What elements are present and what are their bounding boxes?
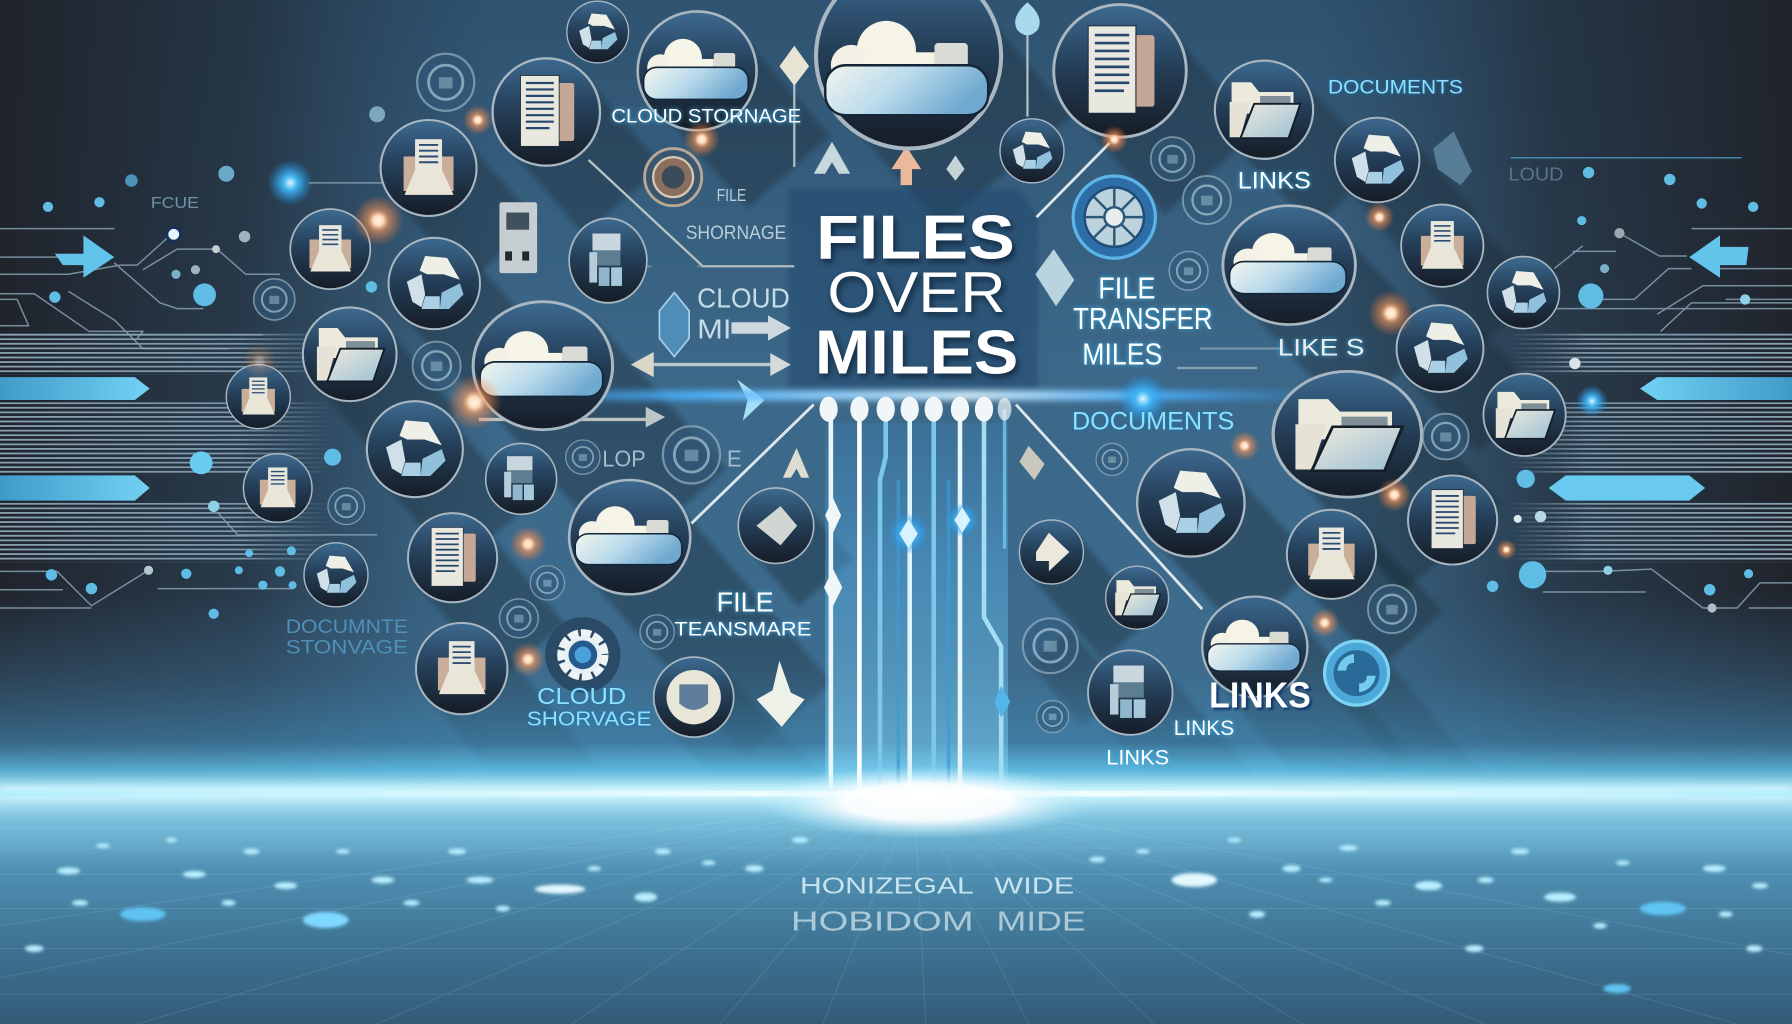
icon: teal ring left (254, 279, 295, 320)
floor sparkles (25, 837, 1768, 993)
right data dots (1487, 167, 1758, 613)
icon: cloud center left (473, 302, 613, 430)
icon: tiny ring (1037, 701, 1069, 733)
icon: document top (1054, 5, 1186, 137)
label: cloud shorvage: SHORVAGE (527, 708, 651, 731)
icon: doc lower far left (243, 454, 312, 522)
icon: small seal file transfer (1169, 251, 1208, 290)
arrow: right connector (770, 353, 791, 376)
icon: target wheel (1073, 176, 1155, 258)
diamond: small (946, 155, 965, 181)
icon: swirl right (1423, 414, 1469, 459)
label: documents center: DOCUMENTS (1072, 408, 1234, 436)
arrow: left connector (631, 352, 654, 377)
arrow: beige star (757, 661, 805, 727)
icon: small ring links (1183, 176, 1231, 224)
arrow: top diamond (779, 46, 809, 86)
label: cloud shorvage: CLOUD (537, 683, 626, 709)
label: lop e (602, 445, 742, 471)
icon: device (499, 202, 537, 273)
floor text: HONIZEGAL (800, 873, 974, 899)
label: links medium: LINKS (1174, 715, 1234, 740)
left data dots (43, 106, 385, 619)
label: lop e: E (727, 445, 742, 471)
icon: small ring right of top doc (1151, 137, 1194, 181)
icon: document left top (381, 120, 477, 216)
icon: small ring documents (1096, 443, 1128, 475)
arrow: up outline (814, 142, 850, 174)
icon: folder left (303, 307, 397, 401)
title panel (789, 189, 1038, 389)
icon: cloud right (1223, 206, 1355, 325)
label: file transfer miles: TRANSFER (1073, 301, 1213, 336)
label: documnte stonvage: DOCUMNTE (286, 616, 408, 638)
title: OVER (827, 261, 1006, 325)
icon: document lower right (1408, 475, 1497, 565)
icon: folder top right (1215, 61, 1313, 159)
icon: beige ring lower (663, 426, 720, 483)
icon: square lower (1088, 650, 1173, 735)
icon: pale ring (417, 54, 474, 111)
arrow: file cloud (768, 315, 791, 341)
arrow: up small center left (783, 448, 809, 478)
floor text (791, 873, 1086, 936)
icon: beige ring (645, 149, 702, 206)
label: cloud mi: MI (697, 313, 731, 344)
floor perspective grid (0, 794, 1792, 1024)
drop: top right of cloud (1015, 2, 1040, 35)
icon: arrow circle (1019, 520, 1083, 584)
icon: folder doc left (290, 209, 370, 289)
left arrow bar lower (0, 475, 150, 501)
icon: square left (486, 443, 557, 514)
arrow: glow triangle (737, 379, 765, 421)
icon: swirl lower right (1368, 585, 1416, 633)
icon: square center left (569, 218, 647, 303)
right arrow bar upper (1640, 377, 1792, 400)
label: links large: LINKS (1209, 674, 1311, 715)
right arrow bar lower (1549, 475, 1705, 501)
icon: recycle left (389, 238, 480, 329)
line nodes (819, 397, 1011, 606)
diagonal long shadows behind icons (350, 57, 1509, 811)
icon: doc small far left (226, 365, 290, 429)
icon: folder far right (1483, 374, 1566, 456)
icon: document upper left (493, 58, 600, 166)
title: FILES (816, 203, 1015, 272)
left circuit traces (0, 183, 383, 608)
left arrow bar upper (0, 377, 150, 400)
horizon glow (0, 766, 1792, 839)
icon: recycle far right (1487, 257, 1559, 329)
label: links: LINKS (1238, 168, 1311, 195)
icon: cloud big top (816, 0, 1001, 149)
left circuit hatch lines (0, 331, 331, 562)
icon: faded shape top right (1433, 131, 1472, 185)
icon: doc bottom left (416, 623, 507, 714)
arrow: lower connector (646, 407, 665, 427)
label: links small: LINKS (1106, 745, 1169, 770)
label: documnte stonvage: STONVAGE (286, 637, 408, 659)
icon: shield ring (654, 657, 734, 737)
label: file transfer miles: FILE (1098, 270, 1155, 305)
label: file transfer miles: MILES (1082, 337, 1162, 372)
icon: ring top (567, 1, 629, 63)
icon: shield ring (1023, 618, 1078, 673)
label: cloud storage top: CLOUD STORNAGE (611, 105, 801, 127)
right arrowhead (1689, 235, 1749, 278)
label: loud: LOUD (1509, 164, 1563, 185)
icon: diamond circle (738, 488, 814, 563)
central glow streak (434, 391, 1326, 400)
icon: recycle right mid (1397, 305, 1483, 392)
title: MILES (815, 319, 1018, 388)
label: fcue: FCUE (151, 195, 199, 212)
orange glows (242, 105, 1517, 677)
icon: recycle center right (1137, 449, 1245, 557)
icon: ring under cloud (1000, 119, 1064, 183)
left arrowhead (55, 235, 114, 278)
title (815, 203, 1018, 388)
icon: small ring lower (499, 599, 538, 638)
label: file transmare (674, 586, 811, 640)
icon: recycle small lower left (304, 543, 368, 607)
diamond: file transfer (1035, 249, 1074, 306)
line glow diamonds (888, 503, 1010, 718)
label: cloud mi: CLOUD (697, 282, 790, 313)
floor text: WIDE (994, 873, 1074, 899)
icon: folder right big (1273, 371, 1422, 497)
label: file transmare: TEANSMARE (674, 618, 811, 640)
icon: recycle left mid (367, 401, 463, 497)
icon: doc lower left (408, 513, 497, 602)
center glow behind transfer lines (825, 423, 1008, 791)
icon: small ring near file transmare (640, 615, 674, 649)
icon: faint ring left (328, 488, 365, 525)
icon: small seal left (566, 440, 600, 474)
icon: small folder (1106, 566, 1169, 629)
icon: cloud lower center (569, 480, 690, 594)
label: cloud shorvage (527, 683, 651, 731)
diamond: center right (1019, 446, 1045, 480)
arrow: beige (891, 146, 921, 185)
icon: cloud top left (638, 11, 757, 130)
label: file transfer miles (1073, 270, 1213, 372)
floor text: MIDE (997, 905, 1086, 936)
vertical transfer lines (819, 397, 1011, 789)
label: like s: LIKE S (1278, 334, 1365, 361)
label: lop e: LOP (602, 445, 646, 471)
icon: recycle right top (1335, 118, 1419, 202)
blue glows (267, 160, 1608, 424)
icon: document right (1401, 205, 1483, 287)
label: file: FILE (717, 185, 746, 205)
floor text: HOBIDOM (791, 905, 974, 936)
right circuit hatch lines (1509, 331, 1792, 562)
connector lines and pointers (479, 29, 1280, 609)
right circuit traces (1511, 158, 1792, 608)
icon: document fold lower right (1287, 510, 1376, 599)
label: shornage: SHORNAGE (686, 222, 786, 244)
icon: emblem near cloud mi (659, 293, 689, 357)
icon: blue ring (1325, 641, 1389, 705)
icon: paperclip ring (530, 566, 565, 600)
label: documnte stonvage (286, 616, 408, 659)
icon: cloud lower right (1202, 597, 1307, 697)
label: file transmare: FILE (717, 586, 774, 617)
icon: gear (545, 617, 621, 693)
icon: ring left (413, 342, 461, 390)
label: documents top right: DOCUMENTS (1328, 77, 1463, 99)
label: cloud mi (697, 282, 790, 344)
